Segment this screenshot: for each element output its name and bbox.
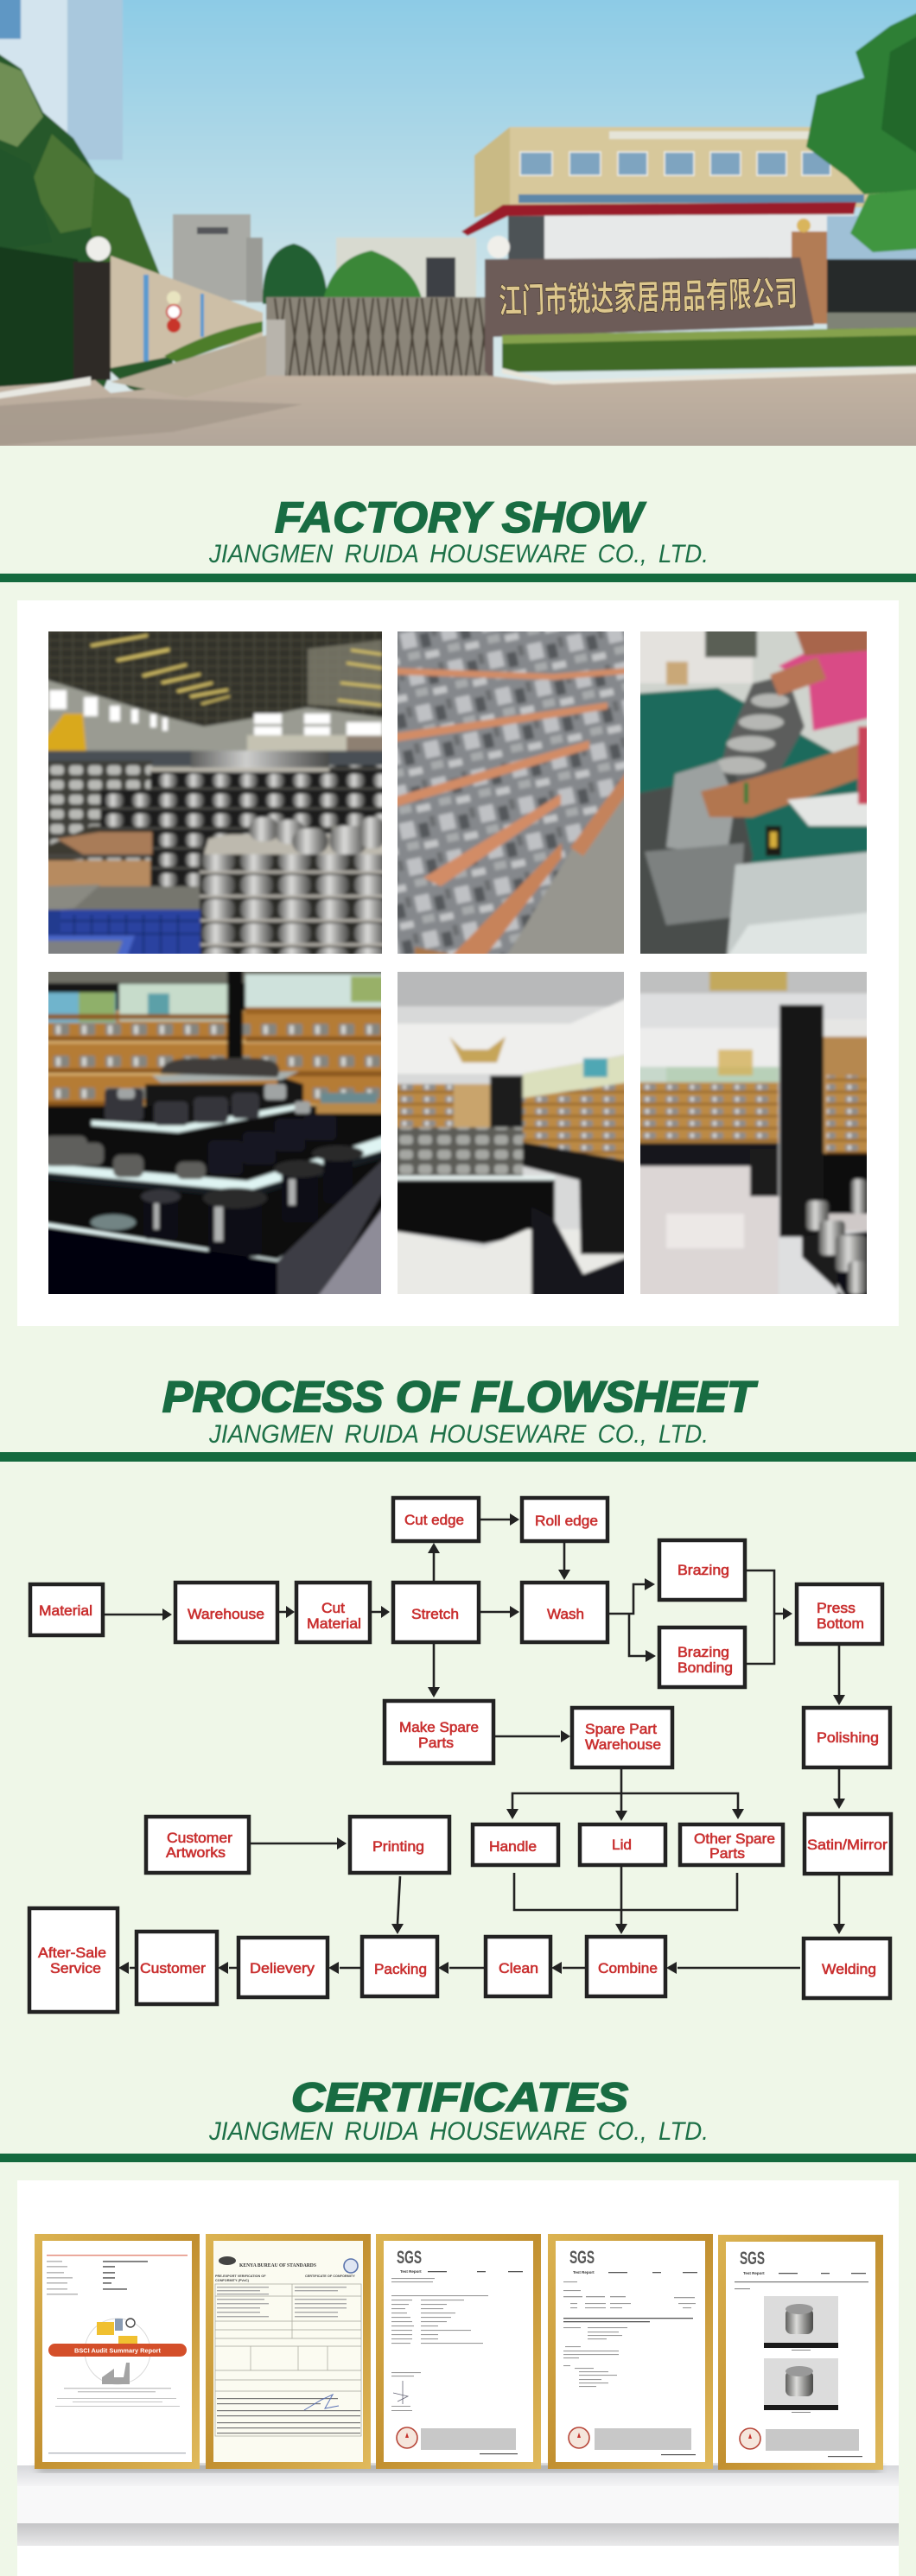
heading: certificates: JIANGMEN RUIDA HOUSEWARE CO., LTD. (208, 2117, 709, 2146)
certificate: SGS test report page 2: SGS (569, 2248, 595, 2268)
photo: pots wrapped on pallets (398, 631, 624, 954)
certificate: Kenya Bureau of Standards: CONFORMITY (PVoC) (215, 2279, 250, 2282)
step: Press Bottom: Press (817, 1600, 856, 1616)
certificate: SGS test report page 3 with pot photos (718, 2235, 883, 2470)
photo: warehouse with stacked pots (48, 631, 382, 954)
step: Wash: Wash (547, 1606, 584, 1622)
step: Brazing Bonding: Bonding (677, 1659, 733, 1676)
photo: showroom with black column (640, 972, 867, 1294)
step: Stretch (393, 1583, 479, 1642)
step: After-Sale Service: After-Sale (38, 1945, 106, 1961)
step: Roll edge (522, 1498, 607, 1541)
certificate: SGS test report page 1: Test Report (400, 2269, 422, 2274)
step: Clean: Clean (499, 1960, 538, 1976)
step: Warehouse: Warehouse (188, 1606, 264, 1622)
step: Satin/Mirror: Satin/Mirror (807, 1837, 887, 1853)
step: Spare Part Warehouse: Warehouse (585, 1736, 661, 1753)
step: Make Spare Parts (385, 1701, 493, 1763)
certificate: SGS test report page 1: SGS (397, 2248, 422, 2268)
step: Packing (362, 1937, 437, 1996)
step: After-Sale Service: Service (50, 1960, 101, 1976)
step: Clean (486, 1937, 550, 1996)
step: Customer Artworks (146, 1817, 249, 1873)
step: Cut Material: Material (307, 1615, 361, 1632)
step: Material (30, 1584, 103, 1635)
step: Welding: Welding (822, 1961, 876, 1977)
certificate: SGS test report page 3 with pot photos: Test Report (743, 2271, 765, 2275)
photo: factory entrance (0, 0, 916, 446)
step: Press Bottom (797, 1584, 882, 1644)
step: Brazing Bonding: Brazing (677, 1644, 729, 1660)
step: Cut Material (296, 1583, 370, 1642)
step: Brazing: Brazing (677, 1562, 729, 1578)
step: Delievery (239, 1938, 328, 1997)
step: Cut edge: Cut edge (404, 1512, 464, 1528)
step: Customer Artworks: Artworks (166, 1844, 226, 1861)
certificate: Kenya Bureau of Standards: PRE-EXPORT VERIFICATION OF (215, 2275, 266, 2278)
panel: certificates wall (17, 2180, 899, 2576)
certificate: SGS test report page 2: Test Report (573, 2270, 595, 2275)
certificate: BSCI audit summary report: BSCI Audit Summary Report (74, 2346, 161, 2355)
certificate: SGS test report page 1 (376, 2234, 541, 2469)
step: Welding (804, 1938, 890, 1998)
photo: showroom display tiers (48, 972, 381, 1294)
step: Printing: Printing (372, 1838, 424, 1855)
certificate: SGS test report page 3 with pot photos: SGS (740, 2249, 765, 2268)
step: Stretch: Stretch (411, 1606, 459, 1622)
step: Other Spare Parts: Parts (709, 1845, 745, 1862)
step: Handle: Handle (489, 1838, 537, 1855)
heading: process of flowsheet: PROCESS OF FLOWSHEET (162, 1373, 759, 1421)
heading: process of flowsheet (162, 1373, 759, 1449)
heading: process of flowsheet: JIANGMEN RUIDA HOUSEWARE CO., LTD. (208, 1420, 709, 1449)
step: Combine (587, 1937, 665, 1996)
certificate: SGS test report page 2 (548, 2234, 713, 2469)
connector arrows (104, 1513, 845, 1974)
step: Lid: Lid (612, 1837, 632, 1853)
step: Spare Part Warehouse: Spare Part (585, 1721, 657, 1737)
certificate: BSCI audit summary report (35, 2234, 200, 2469)
step: Other Spare Parts: Other Spare (694, 1830, 775, 1847)
certificate: Kenya Bureau of Standards (206, 2234, 371, 2469)
step: Delievery: Delievery (250, 1960, 315, 1976)
step: Other Spare Parts (680, 1824, 783, 1865)
step: Combine: Combine (598, 1960, 658, 1976)
chart: production flowchart (29, 1498, 891, 2012)
step: Lid (580, 1824, 665, 1865)
photo: showroom with chandelier (398, 972, 624, 1294)
step: Satin/Mirror (805, 1814, 891, 1874)
panel: factory photos (17, 600, 899, 1326)
step: Brazing (659, 1540, 745, 1600)
certificate: Kenya Bureau of Standards: CERTIFICATE OF CONFORMITY (305, 2275, 355, 2278)
step: Customer: Customer (140, 1960, 206, 1976)
step: Make Spare Parts: Make Spare (399, 1719, 479, 1735)
heading: factory show (208, 493, 709, 568)
step: Roll edge: Roll edge (535, 1513, 598, 1529)
certificate: Kenya Bureau of Standards: KENYA BUREAU OF STANDARDS (239, 2262, 316, 2268)
step: Warehouse (175, 1583, 277, 1642)
step: Polishing (804, 1708, 890, 1767)
photo: packing line workers (640, 631, 867, 954)
step: Printing (350, 1817, 449, 1873)
step: Customer Artworks: Customer (167, 1830, 232, 1846)
step: Customer (137, 1932, 217, 2004)
step: Cut edge (393, 1498, 479, 1541)
step: Brazing Bonding (659, 1627, 745, 1687)
step: Packing: Packing (374, 1961, 427, 1977)
heading: certificates: CERTIFICATES (291, 2074, 628, 2120)
heading: certificates (208, 2074, 709, 2146)
step: After-Sale Service (29, 1908, 118, 2012)
step: Spare Part Warehouse (572, 1708, 672, 1767)
step: Press Bottom: Bottom (817, 1615, 864, 1632)
step: Material: Material (39, 1602, 92, 1619)
step: Polishing: Polishing (817, 1729, 879, 1746)
heading: factory show: JIANGMEN RUIDA HOUSEWARE CO., LTD. (208, 540, 709, 568)
step: Make Spare Parts: Parts (418, 1735, 454, 1751)
step: Cut Material: Cut (321, 1600, 345, 1616)
step: Handle (473, 1824, 558, 1865)
heading: factory show: FACTORY SHOW (275, 493, 646, 542)
step: Wash (522, 1583, 607, 1642)
